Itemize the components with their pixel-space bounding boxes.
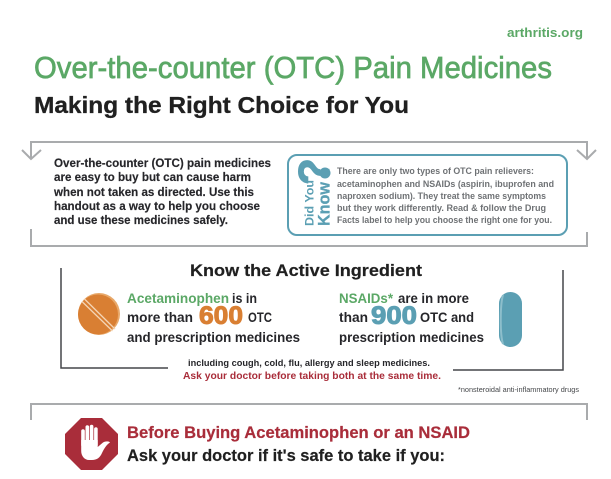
callout text: but they work differently. Read & follow the Drug	[337, 203, 546, 214]
acetaminophen text: Acetaminophen	[127, 290, 229, 306]
panel frame	[31, 404, 587, 420]
intro text: and use these medicines safely.	[54, 215, 228, 227]
nsaids text: prescription medicines	[339, 329, 484, 345]
nsaids text: NSAIDs*	[339, 290, 394, 306]
nsaids text: 900	[371, 302, 417, 330]
heading: Know the Active Ingredient	[190, 261, 422, 280]
panel: introduction	[22, 142, 596, 246]
nsaids text: than	[339, 309, 368, 325]
note: other medicines: including cough, cold, flu, allergy and sleep medicines.	[188, 358, 430, 369]
icon: stop hand	[65, 418, 118, 470]
callout text: Facts label to help you choose the right one for you.	[337, 215, 552, 226]
warning: Ask your doctor before taking both at the same time.	[183, 370, 441, 382]
icon: question mark dot	[320, 168, 330, 178]
acetaminophen text: more than	[127, 309, 193, 325]
did you label: Did You	[302, 180, 316, 226]
callout text	[337, 166, 554, 226]
icon: nsaid capsule	[499, 292, 522, 347]
nsaids text: are in more	[398, 290, 469, 306]
intro text	[53, 158, 271, 227]
subheading: Ask your doctor if it's safe to take if you:	[127, 447, 445, 465]
footnote: *nonsteroidal anti-inflammatory drugs	[458, 385, 579, 394]
source link: arthritis.org	[507, 25, 583, 40]
callout border	[288, 155, 567, 235]
hand palm and thumb	[81, 440, 110, 460]
title: Over-the-counter (OTC) Pain Medicines	[34, 50, 552, 85]
nsaids text: OTC and	[420, 309, 474, 325]
panel frame	[61, 268, 563, 370]
intro text: handout as a way to help you choose	[54, 201, 260, 213]
callout: did you know	[288, 155, 567, 235]
acetaminophen text: OTC	[248, 309, 272, 325]
callout text: There are only two types of OTC pain relievers:	[337, 166, 534, 177]
panel: know the active ingredient	[61, 261, 579, 394]
intro text: when not taken as directed. Use this	[53, 187, 254, 199]
acetaminophen text: is in	[232, 290, 257, 306]
panel frame with arrows	[22, 142, 596, 246]
callout text: naproxen sodium). They treat the same symptoms	[337, 191, 546, 202]
nsaids text	[339, 290, 484, 345]
icon: acetaminophen tablet	[78, 293, 120, 335]
callout text: acetaminophen and NSAIDs (aspirin, ibuprofen and	[337, 179, 554, 190]
icon: question mark: ?	[290, 158, 339, 185]
heading: Before Buying Acetaminophen or an NSAID	[127, 424, 470, 442]
acetaminophen text	[127, 290, 300, 345]
intro text: Over-the-counter (OTC) pain medicines	[54, 158, 271, 170]
acetaminophen text: and prescription medicines	[127, 329, 300, 345]
know label: Know	[314, 181, 334, 226]
intro text: are easy to buy but can cause harm	[54, 172, 251, 184]
subtitle: Making the Right Choice for You	[34, 92, 409, 118]
acetaminophen text: 600	[199, 302, 243, 330]
hand fingers	[83, 426, 96, 445]
panel: before buying	[31, 404, 587, 470]
